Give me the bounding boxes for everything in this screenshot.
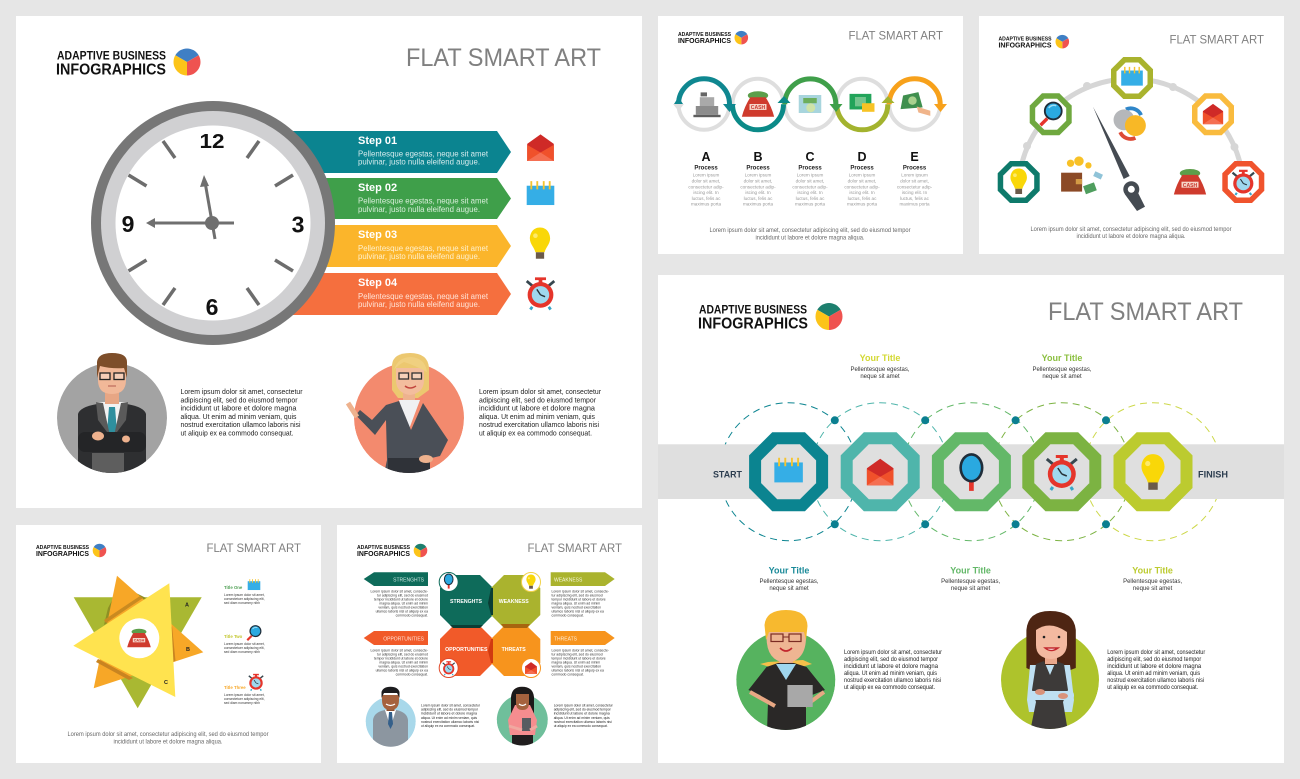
octagon: notepad xyxy=(1111,57,1153,99)
paragraph: dark-haired woman xyxy=(1107,649,1206,691)
process D: Process xyxy=(850,166,874,172)
process B: maximus porta xyxy=(743,202,774,207)
item: title three: consectetuer adipiscing elit, xyxy=(224,697,265,701)
wall clock: 6 xyxy=(206,294,218,320)
process D xyxy=(844,150,880,207)
step 04 banner: Step 04 xyxy=(358,277,398,289)
octagon: bulb xyxy=(1114,432,1192,511)
process B: Process xyxy=(746,166,770,172)
step 04 banner: pulvinar, justo nulla eleifend augue. xyxy=(358,300,480,309)
text: opportunities xyxy=(371,648,428,676)
footer text xyxy=(710,228,910,242)
process E: consectetur adip- xyxy=(897,184,933,189)
paragraph: woman: nostrud exercitation ullamco laboris nisi xyxy=(554,719,612,724)
logo: INFOGRAPHICS xyxy=(998,40,1052,50)
lower title two xyxy=(941,566,1000,592)
item: title two: consectetuer adipiscing elit, xyxy=(224,646,265,650)
paragraph: blonde xyxy=(844,649,943,691)
octagon: magnifier xyxy=(1030,93,1072,135)
text: strengths: commodo consequat. xyxy=(396,614,428,618)
step 03 banner xyxy=(280,225,511,267)
item: title two: Title Two xyxy=(224,634,243,639)
icon: cash bag xyxy=(742,91,774,117)
paragraph: dark-haired woman: nostrud exercitation ullamco laboris nisi xyxy=(1107,677,1204,684)
footer text: Lorem ipsum dolor sit amet, consectetur adipiscing elit, sed do eiusmod tempor xyxy=(710,228,910,234)
item: title three xyxy=(224,674,265,705)
paragraph: businesswoman xyxy=(479,387,601,438)
wall clock: 12 xyxy=(200,131,224,153)
panel: clock steps xyxy=(16,16,642,508)
process D: D xyxy=(857,150,867,164)
paragraph: blonde: adipiscing elit, sed do eiusmod tempor xyxy=(844,656,939,663)
text: opportunities: ullamco laboris nisi ut aliquip ex ea xyxy=(376,668,428,672)
text: threats xyxy=(552,648,609,676)
process B: B xyxy=(753,150,763,164)
text: weakness: magna aliqua. Ut enim ad minim xyxy=(552,602,600,606)
paragraph: dark-haired woman: aliqua. Ut enim ad minim veniam, quis xyxy=(1107,670,1201,677)
octagon: bulb xyxy=(998,161,1040,203)
process C: C xyxy=(805,150,815,164)
person: woman with tablet xyxy=(497,687,548,747)
swot octagons: OPPORTUNITIES xyxy=(445,647,488,653)
process B: dolor sit amet, xyxy=(744,178,772,184)
logo: ADAPTIVE BUSINESS xyxy=(357,545,410,551)
badge: threats xyxy=(522,658,540,678)
top title one: neque sit amet xyxy=(860,374,900,380)
logo: ADAPTIVE BUSINESS xyxy=(678,32,731,38)
top title one: Your Title xyxy=(860,353,900,363)
item: title three: Lorem ipsum dolor sit amet, xyxy=(224,693,265,697)
text: weakness: Lorem ipsum dolor sit amet, consecte- xyxy=(552,590,609,594)
text: weakness xyxy=(552,590,609,618)
gauge needle xyxy=(1093,107,1145,211)
process C: luctus, felis ac xyxy=(796,196,825,201)
panel: process chain xyxy=(658,16,963,254)
star chart xyxy=(73,576,203,708)
top title two: neque sit amet xyxy=(1042,374,1082,380)
title: FLAT SMART ART xyxy=(848,28,944,42)
badge: weakness xyxy=(522,572,540,592)
icon: notepad xyxy=(527,181,554,205)
item: title two: Lorem ipsum dolor sit amet, xyxy=(224,642,265,646)
icon: light bulb xyxy=(530,227,550,259)
badge: strengths xyxy=(439,572,458,592)
process B: luctus, felis ac xyxy=(744,196,773,201)
process A: dolor sit amet, xyxy=(692,178,720,184)
icon: hand with money xyxy=(901,92,930,116)
person: woman with dark hair xyxy=(1001,611,1099,732)
top title one xyxy=(850,353,910,380)
process D: consectetur adip- xyxy=(844,184,880,189)
person: man in grey suit xyxy=(366,687,416,748)
step 04 banner: Pellentesque egestas, neque sit amet xyxy=(358,292,489,301)
text: weakness: ullamco laboris nisi ut aliquip ex ea xyxy=(552,610,604,614)
top title two: Your Title xyxy=(1042,353,1082,363)
logo xyxy=(998,35,1069,50)
top title two xyxy=(1032,353,1092,380)
star chart: C xyxy=(164,680,168,686)
ribbon: weakness xyxy=(551,572,615,586)
gauge arc xyxy=(1019,79,1243,182)
wall clock: 9 xyxy=(122,211,134,237)
lower title three xyxy=(1123,566,1182,592)
lower title three: Pellentesque egestas, xyxy=(1123,579,1182,585)
footer text: incididunt ut labore et dolore magna aliqua. xyxy=(114,740,223,746)
item: title three: Title Three xyxy=(224,685,246,690)
text: opportunities: tur adipiscing elit, sed do eiusmod xyxy=(377,652,428,656)
title: FLAT SMART ART xyxy=(1048,298,1243,326)
text: threats: magna aliqua. Ut enim ad minim xyxy=(552,660,600,664)
star chart: B xyxy=(186,647,190,653)
paragraph: woman xyxy=(554,702,613,728)
paragraph: blonde: aliqua. Ut enim ad minim veniam, quis xyxy=(844,670,938,677)
title: FLAT SMART ART xyxy=(528,541,623,555)
process A: maximus porta xyxy=(691,202,722,207)
step 02 banner: Pellentesque egestas, neque sit amet xyxy=(358,196,489,206)
text: threats: Lorem ipsum dolor sit amet, consecte- xyxy=(552,648,609,652)
paragraph: woman: adipiscing elit, sed do eiusmod tempor xyxy=(554,707,611,712)
text: strengths: tur adipiscing elit, sed do eiusmod xyxy=(377,594,428,598)
text: threats: veniam, quis nostrud exercitation xyxy=(552,664,601,668)
swot octagons: THREATS xyxy=(502,647,526,653)
icon: cash register xyxy=(693,92,721,117)
step 01 banner: pulvinar, justo nulla eleifend augue. xyxy=(358,158,480,166)
icon: money and coins xyxy=(850,94,874,112)
paragraph: man: adipiscing elit, sed do eiusmod tempor xyxy=(421,707,479,712)
process E: luctus, felis ac xyxy=(900,196,930,201)
logo: INFOGRAPHICS xyxy=(678,36,731,45)
swot octagons: WEAKNESS xyxy=(499,599,529,605)
item: title two xyxy=(224,625,265,654)
ribbon: weakness: WEAKNESS xyxy=(554,578,583,584)
process C: maximus porta xyxy=(795,202,826,207)
paragraph: man: nostrud exercitation ullamco laboris nisi xyxy=(421,719,479,724)
logo: INFOGRAPHICS xyxy=(698,316,808,332)
paragraph: woman: aliqua. Ut enim ad minim veniam, quis xyxy=(554,715,610,720)
process E: Lorem ipsum xyxy=(901,173,928,178)
paragraph: blonde: nostrud exercitation ullamco laboris nisi xyxy=(844,677,941,684)
text: strengths: ullamco laboris nisi ut aliquip ex ea xyxy=(376,610,428,614)
process C xyxy=(792,150,828,207)
step 02 banner: pulvinar, justo nulla eleifend augue. xyxy=(358,205,480,214)
paragraph: businessman: ut aliquip ex ea commodo consequat. xyxy=(180,428,294,438)
text: opportunities: magna aliqua. Ut enim ad minim xyxy=(379,660,428,664)
person: businessman xyxy=(57,353,167,474)
logo: ADAPTIVE BUSINESS xyxy=(57,50,166,62)
process B: Lorem ipsum xyxy=(745,173,771,178)
title: FLAT SMART ART xyxy=(206,541,302,555)
paragraph: man: incididunt ut labore et dolore magna xyxy=(421,711,478,716)
person: blonde with tablet xyxy=(736,610,835,732)
logo: ADAPTIVE BUSINESS xyxy=(998,36,1052,42)
paragraph: businessman: adipiscing elit, sed do eiusmod tempor xyxy=(180,395,298,404)
swot octagons xyxy=(440,575,540,676)
paragraph: businesswoman: adipiscing elit, sed do eiusmod tempor xyxy=(479,395,596,404)
step 03 banner: Pellentesque egestas, neque sit amet xyxy=(358,244,489,253)
text: weakness: veniam, quis nostrud exercitation xyxy=(552,606,601,610)
process D: maximus porta xyxy=(847,202,878,207)
text: opportunities: veniam, quis nostrud exercitation xyxy=(378,664,428,668)
ribbon: strengths: STRENGHTS xyxy=(393,578,425,584)
paragraph: businessman xyxy=(180,387,303,438)
text: strengths: magna aliqua. Ut enim ad minim xyxy=(379,602,428,606)
logo: ADAPTIVE BUSINESS xyxy=(699,304,807,316)
start label: START xyxy=(713,470,742,480)
text: weakness: tur adipiscing elit, sed do eiusmod xyxy=(552,594,603,598)
top title one: Pellentesque egestas, xyxy=(850,367,910,373)
process arcs xyxy=(673,79,947,130)
octagon: envelope xyxy=(841,432,920,511)
text: opportunities: commodo consequat. xyxy=(396,672,428,676)
icon: envelope xyxy=(527,134,554,161)
person: businesswoman xyxy=(348,353,464,474)
panel: gauge xyxy=(979,16,1284,254)
process C: dolor sit amet, xyxy=(796,178,824,184)
footer text: incididunt ut labore et dolore magna aliqua. xyxy=(1076,234,1186,240)
text: weakness: tempor incididunt ut labore et dolore xyxy=(552,598,606,602)
panel: start to finish timeline xyxy=(658,275,1284,763)
star chart: A xyxy=(185,602,189,608)
icon: alarm clock xyxy=(527,277,554,310)
item: title three: sed diam nonummy nibh xyxy=(224,701,260,705)
paragraph: man: ut aliquip ex ea commodo consequat. xyxy=(421,723,475,728)
octagon: alarm clock xyxy=(1222,161,1264,203)
paragraph: businesswoman: ut aliquip ex ea commodo consequat. xyxy=(479,428,592,438)
text: threats: tur adipiscing elit, sed do eiusmod xyxy=(552,652,603,656)
paragraph: dark-haired woman: ut aliquip ex ea commodo consequat. xyxy=(1107,684,1198,691)
process A: consectetur adip- xyxy=(688,184,724,189)
paragraph: blonde: ut aliquip ex ea commodo consequat. xyxy=(844,684,935,691)
lower title three: neque sit amet xyxy=(1133,586,1173,592)
lower title one: Pellentesque egestas, xyxy=(759,579,819,585)
logo: INFOGRAPHICS xyxy=(357,549,410,558)
process E: maximus porta xyxy=(899,202,930,207)
process C: iscing elit. In xyxy=(797,190,823,195)
octagon: envelope xyxy=(1192,93,1234,135)
icon: coins xyxy=(1114,108,1146,139)
paragraph: woman: Lorem ipsum dolor sit amet, consectetur xyxy=(554,702,613,708)
paragraph: woman: incididunt ut labore et dolore magna xyxy=(554,711,610,716)
band xyxy=(658,444,1284,499)
badge: opportunities xyxy=(439,658,458,678)
logo: INFOGRAPHICS xyxy=(56,62,166,78)
process E: Process xyxy=(903,166,927,172)
icon: banknote xyxy=(799,95,821,113)
text: strengths: veniam, quis nostrud exercitation xyxy=(378,606,428,610)
process B: iscing elit. In xyxy=(745,190,771,195)
text: weakness: commodo consequat. xyxy=(552,614,584,618)
paragraph: businessman: nostrud exercitation ullamco laboris nisi xyxy=(180,420,301,429)
lower title two: Your Title xyxy=(950,566,991,576)
ribbon: opportunities: OPPORTUNITIES xyxy=(383,636,425,642)
text: threats: ullamco laboris nisi ut aliquip ex ea xyxy=(552,668,604,672)
lower title one: Your Title xyxy=(769,566,809,576)
footer text: Lorem ipsum dolor sit amet, consectetur adipiscing elit, sed do eiusmod tempor xyxy=(1030,227,1232,233)
process C: Process xyxy=(798,166,822,172)
octagon: notepad xyxy=(749,432,828,511)
process D: Lorem ipsum xyxy=(849,173,875,178)
text: strengths: Lorem ipsum dolor sit amet, consecte- xyxy=(371,590,428,594)
step 03 banner: Step 03 xyxy=(358,229,397,241)
step 01 banner: Step 01 xyxy=(358,135,397,147)
process C: Lorem ipsum xyxy=(797,173,823,178)
ribbon: opportunities xyxy=(364,631,428,645)
lower title two: neque sit amet xyxy=(951,586,991,592)
item: title one: Title One xyxy=(224,585,243,590)
text: threats: tempor incididunt ut labore et dolore xyxy=(552,656,606,660)
process D: luctus, felis ac xyxy=(848,196,877,201)
logo xyxy=(56,49,200,78)
ribbon: strengths xyxy=(364,572,428,586)
dashed rings xyxy=(720,403,1222,541)
process B: consectetur adip- xyxy=(740,184,776,189)
logo xyxy=(36,544,106,558)
footer text: incididunt ut labore et dolore magna aliqua. xyxy=(756,236,865,242)
process A xyxy=(688,150,724,207)
paragraph: dark-haired woman: Lorem ipsum dolor sit amet, consectetur xyxy=(1107,649,1206,656)
paragraph: man xyxy=(421,702,481,728)
paragraph: blonde: Lorem ipsum dolor sit amet, consectetur xyxy=(844,649,943,656)
process E xyxy=(897,150,933,207)
process A: luctus, felis ac xyxy=(692,196,721,201)
octagon: alarm clock xyxy=(1022,432,1101,511)
logo xyxy=(357,544,427,558)
item: title two: sed diam nonummy nibh xyxy=(224,650,260,654)
swot octagons: STRENGHTS xyxy=(450,599,483,605)
text: opportunities: Lorem ipsum dolor sit amet, consecte- xyxy=(371,648,428,652)
lower title one xyxy=(759,566,819,592)
process E: E xyxy=(910,150,919,164)
paragraph: man: Lorem ipsum dolor sit amet, consectetur xyxy=(421,702,481,708)
ribbon: threats xyxy=(551,631,615,645)
process E: iscing elit. In xyxy=(902,190,928,195)
text: opportunities: tempor incididunt ut labore et dolore xyxy=(374,656,428,660)
logo xyxy=(678,31,748,45)
panel: star triangles xyxy=(16,525,321,763)
item: title one xyxy=(224,579,265,605)
process C: consectetur adip- xyxy=(792,184,828,189)
footer text xyxy=(68,732,268,746)
paragraph: businesswoman: incididunt ut labore et dolore magna xyxy=(479,404,596,413)
title: FLAT SMART ART xyxy=(1170,33,1265,47)
lower title three: Your Title xyxy=(1132,566,1173,576)
text: strengths: tempor incididunt ut labore et dolore xyxy=(374,598,428,602)
ribbon: threats: THREATS xyxy=(554,636,578,642)
text: threats: commodo consequat. xyxy=(552,672,584,676)
step 01 banner: Pellentesque egestas, neque sit amet xyxy=(358,150,489,158)
paragraph: businessman: incididunt ut labore et dolore magna xyxy=(180,404,297,413)
step 04 banner xyxy=(280,273,511,315)
octagon: magnifier xyxy=(932,432,1011,511)
logo: ADAPTIVE BUSINESS xyxy=(36,545,89,551)
process D: dolor sit amet, xyxy=(848,178,876,184)
paragraph: dark-haired woman: incididunt ut labore et dolore magna xyxy=(1107,663,1202,670)
paragraph: businessman: aliqua. Ut enim ad minim veniam, quis xyxy=(180,412,297,421)
logo: INFOGRAPHICS xyxy=(36,549,89,558)
process A: Process xyxy=(694,166,718,172)
top title two: Pellentesque egestas, xyxy=(1032,367,1092,373)
process D: iscing elit. In xyxy=(849,190,875,195)
paragraph: businesswoman: nostrud exercitation ullamco laboris nisi xyxy=(479,420,599,429)
wall clock: 3 xyxy=(292,212,304,238)
wall clock xyxy=(91,101,335,345)
text: strengths xyxy=(371,590,428,618)
process A: Lorem ipsum xyxy=(693,173,719,178)
paragraph: blonde: incididunt ut labore et dolore magna xyxy=(844,663,938,670)
icon: cash bag xyxy=(1174,169,1206,194)
title: FLAT SMART ART xyxy=(406,44,601,72)
step 02 banner xyxy=(280,178,511,219)
footer text: Lorem ipsum dolor sit amet, consectetur adipiscing elit, sed do eiusmod tempor xyxy=(68,732,268,738)
lower title one: neque sit amet xyxy=(769,586,809,592)
paragraph: dark-haired woman: adipiscing elit, sed do eiusmod tempor xyxy=(1107,656,1202,663)
lower title two: Pellentesque egestas, xyxy=(941,579,1000,585)
paragraph: man: aliqua. Ut enim ad minim veniam, quis xyxy=(421,715,477,720)
process E: dolor sit amet, xyxy=(900,178,929,184)
footer text xyxy=(1030,227,1232,240)
panel: SWOT xyxy=(337,525,642,763)
process A: A xyxy=(701,150,711,164)
process A: iscing elit. In xyxy=(693,190,719,195)
item: title one: consectetuer adipiscing elit, xyxy=(224,597,265,601)
paragraph: businessman: Lorem ipsum dolor sit amet, consectetur xyxy=(180,387,303,396)
paragraph: businesswoman: aliqua. Ut enim ad minim veniam, quis xyxy=(479,412,595,421)
ring dots xyxy=(831,416,1110,528)
step 02 banner: Step 02 xyxy=(358,182,397,194)
icon: wallet xyxy=(1061,156,1103,194)
logo xyxy=(698,303,842,332)
item: title one: sed diam nonummy nibh xyxy=(224,601,260,605)
item: title one: Lorem ipsum dolor sit amet, xyxy=(224,593,265,597)
step 01 banner xyxy=(280,131,511,173)
step 03 banner: pulvinar, justo nulla eleifend augue. xyxy=(358,252,480,261)
paragraph: woman: ut aliquip ex ea commodo consequat. xyxy=(554,723,608,728)
finish label: FINISH xyxy=(1198,470,1228,480)
paragraph: businesswoman: Lorem ipsum dolor sit amet, consectetur xyxy=(479,387,601,396)
process B xyxy=(740,150,776,207)
